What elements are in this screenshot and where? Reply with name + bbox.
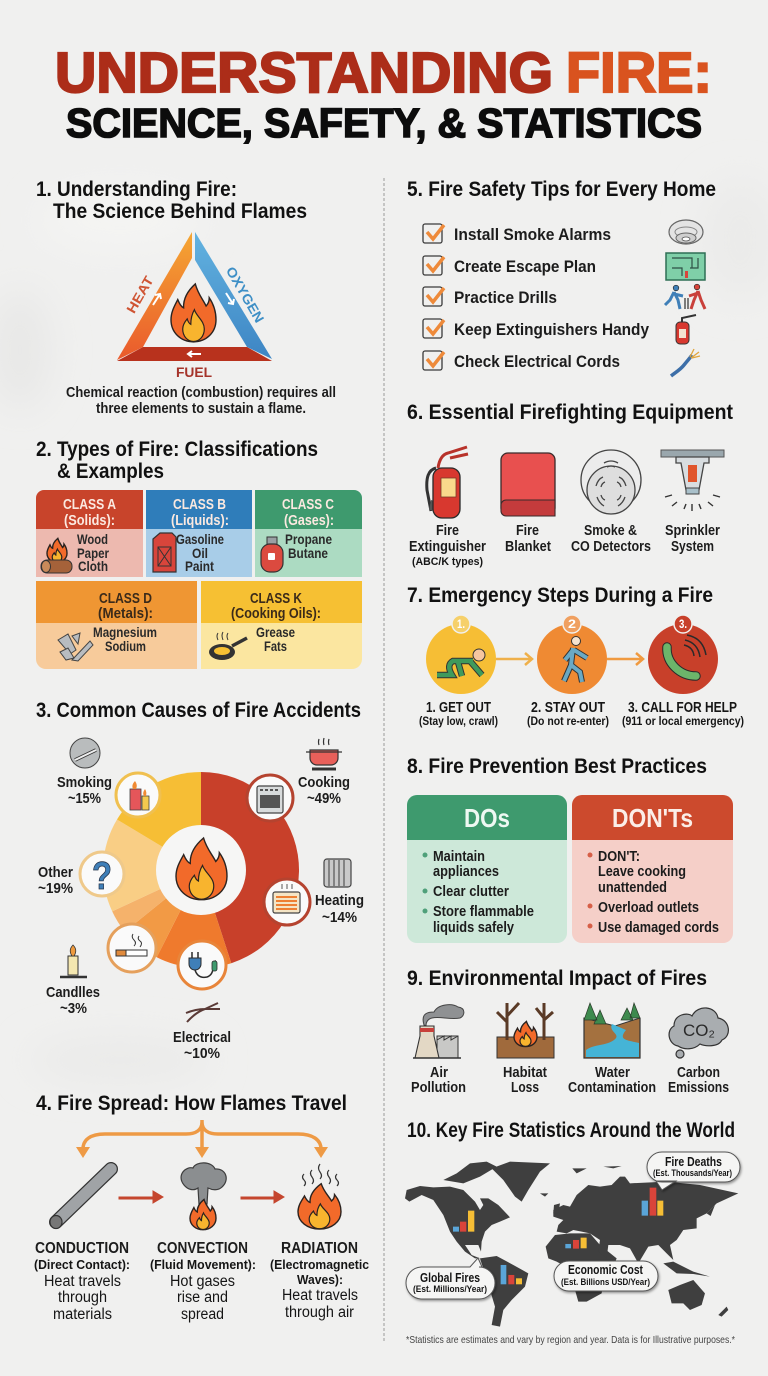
label electrical — [173, 1029, 231, 1062]
icon: drill people — [665, 284, 705, 309]
fire blanket: Blanket — [505, 539, 551, 555]
label candles — [46, 984, 100, 1017]
panel: 4 fire spread — [34, 1092, 369, 1323]
fire extinguisher — [409, 447, 486, 568]
class C card: CLASS C — [282, 497, 334, 513]
label heating — [315, 892, 364, 926]
heading 3: 3. Common Causes of Fire Accidents — [36, 699, 361, 722]
class D card: Sodium — [105, 638, 146, 654]
carbon emissions: Carbon — [677, 1065, 720, 1081]
air pollution: Air — [430, 1065, 448, 1081]
radiation text: (Electromagnetic — [270, 1257, 369, 1272]
title: UNDERSTANDING — [55, 41, 553, 105]
heading 6: 6. Essential Firefighting Equipment — [407, 401, 733, 424]
class D card: (Metals): — [98, 606, 153, 622]
icon: phone — [667, 635, 706, 676]
conduction text: CONDUCTION — [35, 1240, 129, 1257]
convection text — [150, 1240, 256, 1323]
icon: factory — [413, 1005, 464, 1058]
label heating: ~14% — [322, 909, 357, 926]
conduction text — [34, 1240, 130, 1323]
badge: heater — [264, 879, 310, 925]
tip: keep extinguishers handy: Keep Extinguishers Handy — [454, 320, 649, 339]
heading 7: 7. Emergency Steps During a Fire — [407, 584, 713, 607]
icon: frayed cord — [671, 349, 700, 376]
panel: 10 world statistics — [405, 1119, 740, 1346]
dos list: appliances — [433, 864, 499, 880]
class C card: Propane — [285, 531, 332, 547]
class D card: CLASS D — [99, 591, 152, 607]
class B card: Gasoline — [176, 531, 224, 547]
callout: fire deaths: (Est. Thousands/Year) — [653, 1168, 732, 1179]
donts list: Overload outlets — [598, 900, 699, 916]
dos list: Store flammable — [433, 904, 534, 920]
label other: ~19% — [38, 880, 73, 897]
tip: practice drills: Practice Drills — [454, 288, 557, 307]
step 3 call for help: 3. — [679, 617, 687, 631]
convection text: CONVECTION — [157, 1240, 248, 1257]
step 3 call for help: (911 or local emergency) — [622, 714, 744, 728]
icon: smoke alarm — [669, 220, 703, 244]
caption: three elements to sustain a flame. — [96, 401, 306, 417]
convection text: spread — [181, 1306, 224, 1323]
class K card: CLASS K — [250, 591, 302, 607]
badge: question mark: ? — [92, 855, 112, 898]
class B card: (Liquids): — [171, 513, 229, 529]
convection text: rise and — [177, 1289, 228, 1306]
panel: 8 prevention best practices — [407, 755, 733, 943]
label candles: Candlles — [46, 984, 100, 1001]
panel: 2 types of fire — [36, 438, 362, 669]
class B card: Paint — [185, 558, 214, 574]
icon: burning log — [41, 538, 72, 573]
class C card: (Gases): — [284, 513, 334, 529]
heading 1 — [36, 178, 307, 223]
panel: 9 environmental impact — [407, 967, 729, 1096]
icon: extinguisher — [427, 447, 468, 518]
convection text: (Fluid Movement): — [150, 1257, 256, 1272]
fire blanket: Fire — [516, 523, 539, 539]
class K card: Grease — [256, 624, 295, 640]
callout: economic cost: (Est. Billions USD/Year) — [561, 1277, 650, 1288]
bars asia — [642, 1188, 663, 1216]
label candles: ~3% — [60, 1000, 87, 1017]
icon: blanket — [501, 453, 555, 516]
class B card: Oil — [192, 545, 208, 561]
class A card: Paper — [77, 545, 109, 561]
icon: frying pan — [209, 632, 247, 660]
heading 2: 2. Types of Fire: Classifications — [36, 438, 318, 461]
heat side — [117, 232, 192, 360]
icon: convection smoke and flame — [181, 1163, 226, 1230]
class K card: Fats — [264, 638, 287, 654]
label electrical: ~10% — [184, 1045, 220, 1062]
oxygen side — [195, 232, 272, 359]
caption — [66, 385, 336, 417]
sprinkler system: System — [671, 539, 714, 555]
label other: Other — [38, 864, 73, 881]
class B card: CLASS B — [173, 497, 226, 513]
title: FIRE: — [566, 41, 712, 105]
title — [55, 41, 712, 146]
fuel side — [117, 347, 272, 361]
donts card: DON'Ts — [612, 803, 693, 833]
label smoking: Smoking — [57, 774, 112, 791]
sprinkler system — [661, 450, 724, 555]
icon: escape plan map — [666, 253, 705, 280]
panel: 1 understanding fire — [36, 178, 336, 417]
dos card — [407, 795, 567, 943]
donts list: Leave cooking — [598, 864, 686, 880]
center circle — [156, 825, 246, 915]
label heating: Heating — [315, 892, 364, 909]
heading 1: The Science Behind Flames — [53, 200, 307, 223]
panel: 3 common causes — [36, 699, 364, 1062]
icon: crawling person — [437, 649, 485, 676]
panel: 5 safety tips — [407, 178, 716, 376]
tip: practice drills — [423, 287, 557, 307]
callout: fire deaths — [647, 1152, 740, 1190]
step 2 stay out: (Do not re-enter) — [527, 714, 609, 728]
conduction text: (Direct Contact): — [34, 1257, 130, 1272]
tip: create escape plan: Create Escape Plan — [454, 257, 596, 276]
conduction text: through — [58, 1289, 107, 1306]
conduction text: materials — [53, 1306, 112, 1323]
bars north america — [453, 1211, 474, 1232]
class K card — [201, 581, 362, 669]
icon: detector — [581, 450, 641, 514]
badge: candles — [116, 773, 160, 817]
radiation text: Waves): — [297, 1272, 343, 1287]
step 3 call for help: 3. CALL FOR HELP — [628, 700, 737, 716]
radiation text: RADIATION — [281, 1240, 358, 1257]
water contamination: Contamination — [568, 1080, 656, 1096]
icon: sprinkler — [661, 450, 724, 511]
heading 1: 1. Understanding Fire: — [36, 178, 237, 201]
habitat loss: Habitat — [503, 1065, 547, 1081]
callout: global fires: Global Fires — [420, 1271, 480, 1285]
smoke and co detectors: CO Detectors — [571, 539, 651, 555]
step 1 get out — [419, 615, 498, 728]
water contamination: Water — [595, 1065, 630, 1081]
icon: central flame — [176, 838, 227, 900]
fire extinguisher: Extinguisher — [409, 539, 486, 555]
carbon emissions — [668, 1008, 729, 1096]
step 2 stay out — [527, 615, 609, 728]
radiation text — [270, 1240, 369, 1321]
fire blanket — [501, 453, 555, 555]
donts card — [572, 795, 733, 943]
callout: fire deaths: Fire Deaths — [665, 1155, 722, 1169]
icon: jerry can — [153, 533, 176, 572]
icon: flame — [171, 284, 216, 342]
air pollution: Pollution — [411, 1080, 466, 1096]
label electrical: Electrical — [173, 1029, 231, 1046]
radiation text: through air — [285, 1304, 354, 1321]
badge: question mark — [80, 852, 124, 898]
badge: plug — [178, 941, 226, 989]
badge: cigarette — [108, 924, 156, 972]
label smoking: ~15% — [68, 790, 101, 807]
tip: install smoke alarms: Install Smoke Alarms — [454, 225, 611, 244]
icon: frayed wire — [186, 1003, 220, 1022]
heat label: HEAT — [124, 273, 157, 316]
arrow convection to radiation — [241, 1191, 284, 1203]
donut chart — [103, 772, 299, 968]
heading 2 — [36, 438, 318, 483]
icon: co2 cloud: CO₂ — [683, 1021, 715, 1040]
convection text: Hot gases — [170, 1273, 235, 1290]
icon: burning habitat — [497, 1003, 554, 1058]
panel: 7 emergency steps — [407, 584, 744, 728]
callout: global fires — [406, 1258, 495, 1299]
step 2 stay out: 2 — [568, 617, 576, 631]
icon: candle — [60, 945, 87, 977]
class B card — [146, 490, 252, 577]
step 3 call for help — [622, 615, 744, 728]
heading 9: 9. Environmental Impact of Fires — [407, 967, 707, 990]
heading 2: & Examples — [57, 460, 164, 483]
dos list — [422, 849, 534, 936]
title: SCIENCE, SAFETY, & STATISTICS — [66, 100, 702, 146]
badge: stove — [247, 775, 293, 821]
label smoking — [57, 774, 112, 807]
radiation text: Heat travels — [282, 1287, 358, 1304]
donts list: unattended — [598, 880, 667, 896]
icon: radiator — [324, 859, 351, 887]
heading 8: 8. Fire Prevention Best Practices — [407, 755, 707, 778]
fuel label: FUEL — [176, 365, 212, 380]
callout: economic cost: Economic Cost — [568, 1263, 644, 1277]
class K card: (Cooking Oils): — [231, 606, 321, 622]
bars south america — [501, 1265, 522, 1284]
icon: polluted river — [584, 1003, 640, 1058]
smoke and co detectors: Smoke & — [584, 523, 637, 539]
class C card — [255, 490, 362, 577]
carbon emissions: Emissions — [668, 1080, 729, 1096]
dos list: liquids safely — [433, 920, 514, 936]
step 1 get out: (Stay low, crawl) — [419, 714, 498, 728]
bars africa — [565, 1238, 587, 1249]
dos card: DOs — [464, 803, 510, 833]
heading 4: 4. Fire Spread: How Flames Travel — [36, 1092, 347, 1115]
panel: 6 firefighting equipment — [407, 401, 733, 568]
habitat loss: Loss — [511, 1080, 539, 1096]
tip: check electrical cords: Check Electrical Cords — [454, 352, 620, 371]
fire triangle diagram — [117, 232, 272, 380]
donts list: DON'T: — [598, 849, 640, 865]
label cooking: ~49% — [307, 790, 341, 807]
class D card: Magnesium — [93, 624, 157, 640]
fire extinguisher: (ABC/K types) — [412, 556, 483, 568]
class D card — [36, 581, 197, 669]
smoke and co detectors — [571, 450, 651, 555]
class A card: Wood — [77, 531, 108, 547]
arrow conduction to convection — [119, 1191, 163, 1203]
class C card: Butane — [288, 545, 328, 561]
icon: metal shards — [58, 633, 93, 661]
world map — [405, 1162, 738, 1327]
icon: metal rod — [50, 1169, 111, 1228]
icon: radiation flame — [298, 1164, 341, 1229]
class A card: (Solids): — [64, 513, 115, 529]
arrows in triangle — [153, 293, 234, 357]
branching arrows — [76, 1120, 328, 1158]
donts list — [588, 849, 719, 936]
dos list: Maintain — [433, 849, 485, 865]
class A card: Cloth — [78, 558, 108, 574]
class A card: CLASS A — [63, 497, 116, 513]
icon: smoking — [70, 738, 100, 768]
callout: global fires: (Est. Millions/Year) — [413, 1284, 487, 1295]
icon: propane tank — [261, 537, 283, 572]
callout: economic cost — [554, 1261, 658, 1291]
heading 5: 5. Fire Safety Tips for Every Home — [407, 178, 716, 201]
habitat loss — [497, 1003, 554, 1096]
step 1 get out: 1. GET OUT — [426, 700, 491, 716]
fire extinguisher: Fire — [436, 523, 459, 539]
air pollution — [411, 1005, 466, 1096]
arrow step 2 to 3 — [607, 653, 643, 665]
icon: small extinguisher — [676, 315, 696, 344]
donts list: Use damaged cords — [598, 920, 719, 936]
oxygen label: OXYGEN — [223, 264, 267, 325]
label cooking — [298, 774, 350, 807]
class A card — [36, 490, 143, 577]
water contamination — [568, 1003, 656, 1096]
caption: Chemical reaction (combustion) requires all — [66, 385, 336, 401]
label other — [38, 864, 73, 897]
dos list: Clear clutter — [433, 884, 509, 900]
conduction text: Heat travels — [44, 1273, 121, 1290]
icon: walking person — [564, 636, 587, 682]
sprinkler system: Sprinkler — [665, 523, 720, 539]
step 2 stay out: 2. STAY OUT — [531, 700, 605, 716]
arrow step 1 to 2 — [496, 653, 532, 665]
step 1 get out: 1. — [457, 617, 465, 631]
icon: cooking pot — [306, 738, 342, 769]
label cooking: Cooking — [298, 774, 350, 791]
